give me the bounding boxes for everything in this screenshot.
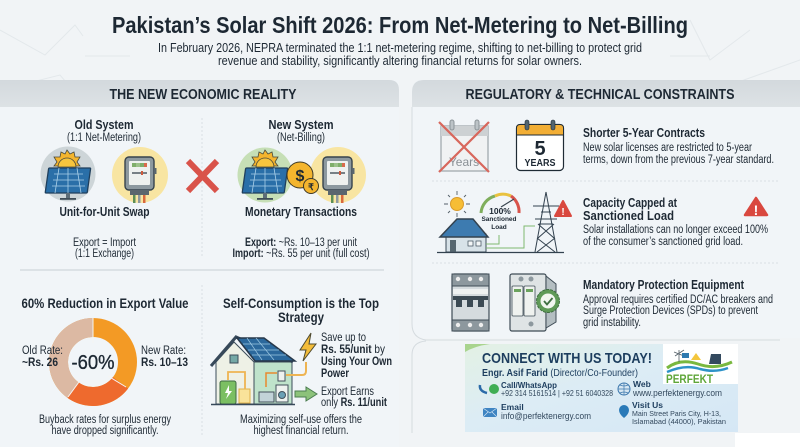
icon: envelope	[483, 408, 497, 417]
row: shorter contracts: Shorter 5-Year Contracts	[583, 125, 705, 140]
row: mandatory protection equipment: grid instability.	[583, 317, 641, 329]
corner patch	[735, 433, 800, 447]
old system: Old System	[74, 117, 134, 132]
contact: web: www.perfektenergy.com	[632, 388, 722, 398]
contact: email: info@perfektenergy.com	[501, 411, 591, 421]
icon: gauge: 100%	[489, 206, 511, 216]
icon: breaker	[452, 274, 489, 331]
contact: email	[501, 402, 591, 421]
old system: (1:1 Exchange)	[75, 248, 134, 260]
icon: crossed calendar: Years	[449, 155, 479, 169]
icon: small warning	[555, 201, 571, 218]
icon: small warning: !	[561, 207, 565, 218]
icon: red cross	[188, 161, 217, 191]
icon: lightning and arrow	[286, 333, 316, 375]
contact panel	[412, 341, 738, 433]
icon: sun	[444, 191, 470, 217]
panel heading: new economic reality: THE NEW ECONOMIC REALITY	[110, 87, 297, 103]
self-consumption section: Save up to	[321, 330, 366, 344]
new system: (Net-Billing)	[277, 132, 325, 144]
icon: warning triangle: !	[754, 202, 758, 218]
icon: warning triangle	[745, 198, 767, 218]
logo: perfekt	[663, 344, 738, 386]
icon: gauge	[481, 194, 519, 231]
icon: 5 years calendar: 5	[534, 138, 546, 160]
panel heading: regulatory: REGULATORY & TECHNICAL CONSTRAINTS	[466, 87, 735, 103]
new system: Import: ~Rs. 55 per unit (full cost)	[232, 248, 370, 260]
icon: house with solar and battery	[211, 337, 295, 404]
panel heading: regulatory	[412, 80, 800, 107]
donut section: 60% Reduction in Export Value	[22, 295, 189, 311]
donut section	[22, 295, 189, 437]
new system	[232, 117, 370, 260]
self-consumption section: Export Earns	[321, 386, 374, 398]
old system: Unit-for-Unit Swap	[60, 204, 150, 219]
donut section: Buyback rates for surplus energy	[39, 414, 171, 426]
old system	[40, 117, 168, 260]
contact: email: Email	[501, 402, 524, 412]
icon: solar panel	[40, 146, 96, 202]
contact: web: Web	[633, 379, 651, 389]
self-consumption section: Self-Consumption is the Top	[223, 295, 379, 311]
panel: the new economic reality	[0, 80, 399, 447]
icon: house	[437, 219, 564, 252]
contact: call: Call/WhatsApp	[501, 380, 557, 390]
row: mandatory protection equipment: Mandatory Protection Equipment	[583, 277, 745, 292]
row: mandatory protection equipment	[452, 274, 773, 331]
self-consumption section: Using Your Own	[321, 354, 392, 368]
contact heading: CONNECT WITH US TODAY!	[482, 350, 652, 367]
subtitle	[158, 41, 642, 68]
self-consumption section	[211, 295, 392, 437]
row: capacity capped	[437, 191, 768, 252]
self-consumption section: Power	[321, 366, 349, 380]
donut section: Rs. 10–13	[141, 357, 188, 369]
donut chart	[58, 318, 128, 397]
icon: globe	[618, 383, 630, 395]
icon: 5 years calendar	[516, 120, 564, 170]
icon: surge protection device	[510, 274, 556, 331]
contact: web	[632, 379, 722, 398]
self-consumption section: only Rs. 11/unit	[321, 397, 387, 409]
donut section: New Rate:	[141, 345, 186, 357]
row: capacity capped: Capacity Capped at	[583, 195, 678, 210]
icon: 5 years calendar: YEARS	[524, 157, 556, 169]
row: capacity capped: Sanctioned Load	[583, 208, 674, 223]
donut section: ~Rs. 26	[22, 357, 58, 369]
row: capacity capped: of the consumer’s sanctioned grid load.	[583, 236, 743, 248]
row: shorter contracts	[439, 120, 774, 172]
icon: transmission tower	[533, 192, 559, 252]
panel heading: new economic reality	[0, 80, 399, 107]
icon: green export arrow	[295, 387, 317, 401]
contact: address: Islamabad (44000), Pakistan	[632, 417, 726, 426]
contact: address	[632, 400, 726, 426]
logo: perfekt: PERFEKT	[666, 374, 713, 386]
icon: coins	[287, 162, 318, 194]
self-consumption section: Maximizing self-use offers the	[240, 414, 362, 426]
panel: regulatory and technical constraints	[412, 80, 800, 340]
subtitle: In February 2026, NEPRA terminated the 1:1 net-metering regime, shifting to net-billing to protect grid	[158, 41, 642, 55]
old system: Export = Import	[73, 237, 137, 249]
donut section: Old Rate:	[22, 345, 63, 357]
icon: crossed calendar	[439, 120, 489, 172]
icon: green check badge	[536, 290, 560, 312]
icon: coins: ₹	[308, 182, 314, 192]
new system: New System	[268, 117, 334, 132]
new system: Export: ~Rs. 10–13 per unit	[245, 237, 358, 249]
subtitle: revenue and stability, significantly altering financial returns for solar owners.	[218, 54, 582, 68]
contact: call: +92 314 5161514 | +92 51 6040328	[501, 388, 613, 398]
icon: meter	[112, 147, 168, 203]
title: Pakistan’s Solar Shift 2026: From Net-Metering to Net-Billing	[112, 12, 688, 38]
contact: address: Main Street Paris City, H-13,	[632, 409, 721, 418]
icon: solar panel green	[238, 148, 292, 202]
self-consumption section: Strategy	[278, 309, 324, 325]
old system: (1:1 Net-Metering)	[67, 132, 141, 144]
donut chart: -60%	[72, 352, 115, 374]
row: shorter contracts: New solar licenses are restricted to 5-year	[583, 142, 752, 154]
contact: call	[501, 380, 613, 398]
contact: address: Visit Us	[632, 400, 663, 410]
icon: gauge: Load	[491, 224, 507, 231]
icon: meter amber	[310, 147, 366, 203]
donut section: have dropped significantly.	[52, 425, 158, 437]
new system: Monetary Transactions	[245, 204, 357, 219]
contact person: Engr. Asif Farid (Director/Co-Founder)	[482, 368, 638, 379]
self-consumption section: highest financial return.	[254, 425, 348, 437]
self-consumption section: Rs. 55/unit by	[321, 342, 385, 356]
icon: phone and whatsapp	[480, 384, 499, 394]
icon: gauge: Sanctioned	[481, 216, 517, 223]
icon: location pin	[619, 405, 629, 418]
icon: coins: $	[296, 168, 305, 185]
